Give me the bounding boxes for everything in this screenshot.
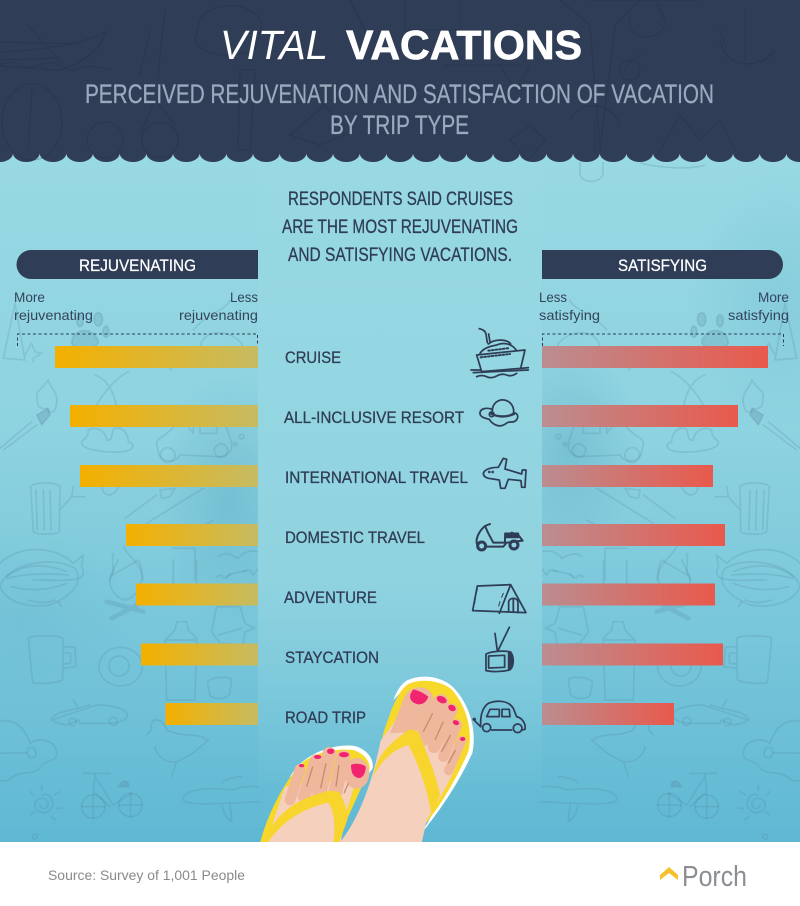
trip type labels <box>284 348 468 727</box>
panel: satisfying chart <box>539 250 789 725</box>
heading pill: satisfying: SATISFYING <box>618 256 707 275</box>
icon: sun hat <box>480 400 518 426</box>
icon: tent <box>473 585 526 613</box>
footer <box>0 842 800 906</box>
axis labels: satisfying <box>539 289 789 323</box>
scallop tail doodles <box>580 162 705 181</box>
right foot strap <box>373 729 440 815</box>
icon: scooter <box>477 524 523 550</box>
background <box>0 150 800 842</box>
trip type labels: INTERNATIONAL TRAVEL <box>285 468 468 487</box>
right foot nails <box>410 689 465 741</box>
trip type labels: DOMESTIC TRAVEL <box>285 528 425 547</box>
left foot <box>260 746 373 843</box>
subtitle: BY TRIP TYPE <box>330 110 469 140</box>
heading pill: rejuvenating: REJUVENATING <box>79 256 196 275</box>
logo: Porch <box>660 861 747 893</box>
axis labels: rejuvenating: Less <box>230 289 258 305</box>
left foot strap <box>263 791 348 843</box>
trip type labels: ROAD TRIP <box>285 708 366 727</box>
callout text: AND SATISFYING VACATIONS. <box>288 245 512 266</box>
photo: feet in flip-flops <box>260 677 474 843</box>
axis labels: rejuvenating: rejuvenating <box>14 307 93 323</box>
axis labels: rejuvenating <box>14 289 258 323</box>
title <box>220 22 582 68</box>
icon: television <box>486 627 513 672</box>
panel: center column <box>258 160 542 800</box>
header doodles <box>0 0 775 160</box>
trip type labels: STAYCATION <box>285 648 379 667</box>
callout text: ARE THE MOST REJUVENATING <box>282 217 518 238</box>
logo: Porch: Porch <box>682 861 747 893</box>
doodle pattern right <box>540 300 800 839</box>
left foot nails <box>299 749 366 778</box>
trip type labels: ADVENTURE <box>284 588 377 607</box>
icon: airplane <box>483 458 526 488</box>
axis labels: rejuvenating: rejuvenating <box>179 307 258 323</box>
heading pill: satisfying <box>542 250 783 279</box>
bars: rejuvenating <box>55 346 258 725</box>
icon: cruise ship <box>471 329 528 378</box>
right foot <box>339 677 474 843</box>
scallop edge <box>0 150 800 162</box>
axis labels: satisfying: satisfying <box>539 307 600 323</box>
source note: Source: Survey of 1,001 People <box>48 868 245 883</box>
header <box>0 0 800 162</box>
panel: rejuvenating chart <box>14 250 258 725</box>
icon: car <box>473 701 525 733</box>
trip type labels: CRUISE <box>285 348 341 367</box>
doodle pattern left <box>0 300 260 839</box>
subtitle <box>85 79 714 140</box>
callout text: RESPONDENTS SAID CRUISES <box>288 189 513 210</box>
axis labels: rejuvenating: More <box>14 289 45 305</box>
bars: satisfying <box>542 346 768 725</box>
trip type labels: ALL-INCLUSIVE RESORT <box>284 408 464 427</box>
heading pill: rejuvenating <box>17 250 258 279</box>
axis labels: satisfying: satisfying <box>728 307 789 323</box>
axis labels: satisfying: More <box>758 289 789 305</box>
callout text <box>282 189 518 266</box>
title: VITAL <box>220 22 328 68</box>
axis labels: satisfying: Less <box>539 289 567 305</box>
title: VACATIONS <box>346 22 582 68</box>
